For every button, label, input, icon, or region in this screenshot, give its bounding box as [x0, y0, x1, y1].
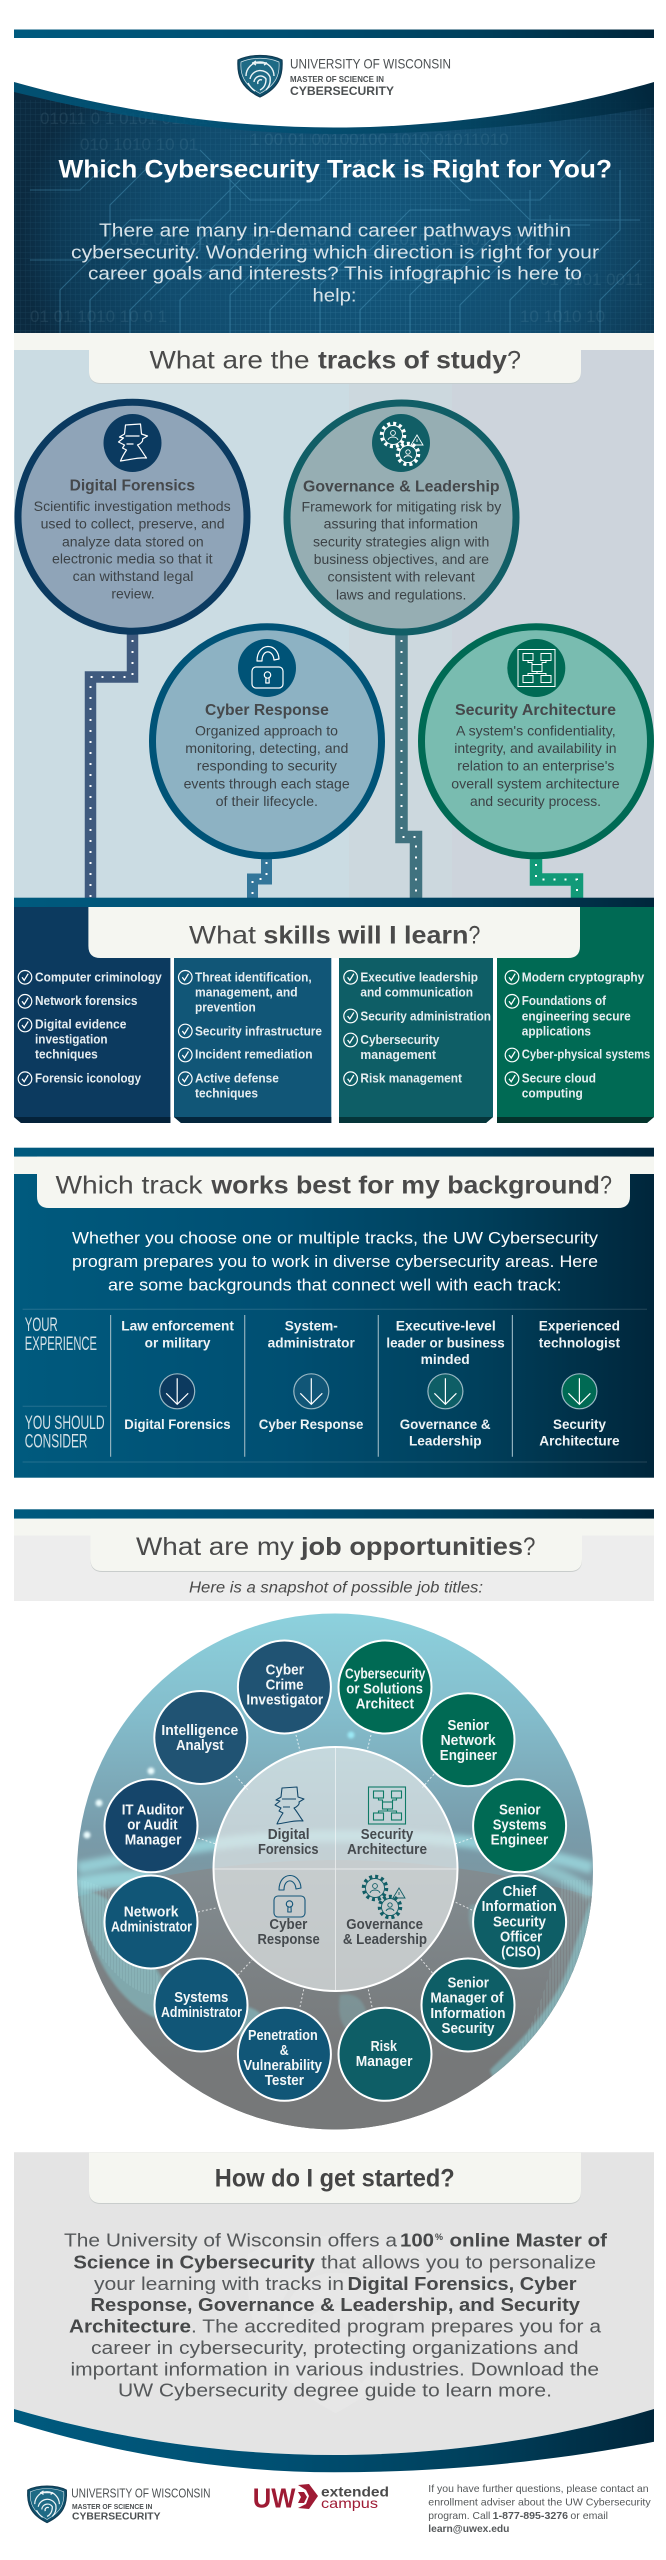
column: system administrator: Cyber Response	[259, 1417, 364, 1432]
logo wordmark: UNIVERSITY OF WISCONSIN	[290, 55, 451, 71]
icon: chevron badge	[298, 2484, 318, 2509]
contact note: If you have further questions, please contact an	[428, 2483, 649, 2495]
check list: Incident remediation	[195, 1047, 313, 1062]
heading: tracks of study: ?	[507, 346, 521, 374]
column: executive leader: leader or business	[386, 1335, 505, 1350]
job: cyber crime investigator	[238, 1640, 331, 1734]
row label: your experience: YOUR	[25, 1315, 58, 1336]
section: header and hero	[14, 30, 654, 333]
label: security architecture	[347, 1827, 427, 1858]
job: cybersecurity or solutions architect: Architect	[356, 1696, 414, 1712]
column: system administrator: administrator	[268, 1335, 356, 1350]
track description: Governance & Leadership	[303, 479, 500, 496]
intro paragraph: are some backgrounds that connect well with each track:	[108, 1276, 562, 1295]
column: law enforcement	[121, 1319, 235, 1432]
label: governance and leadership	[343, 1917, 427, 1948]
column: law enforcement: Digital Forensics	[124, 1417, 231, 1432]
check list: Security infrastructure	[195, 1023, 322, 1038]
connector: governance and leadership	[402, 635, 416, 898]
job: chief information security officer: Security	[493, 1914, 546, 1930]
label: security architecture: Security	[361, 1827, 413, 1843]
job: it auditor or audit manager: or Audit	[127, 1818, 178, 1834]
tracks background	[14, 333, 654, 898]
center circle: track categories	[214, 1747, 458, 1991]
white header panel	[14, 38, 654, 128]
panel: skills	[14, 898, 654, 1123]
track description: Digital Forensics	[70, 478, 195, 495]
column: experienced technologist: Architecture	[539, 1434, 620, 1449]
track description: of their lifecycle.	[216, 793, 318, 809]
hero background with circuit pattern: 101010 1001 10101 1	[390, 230, 555, 249]
job: senior network engineer	[422, 1693, 514, 1786]
track description: electronic media so that it	[52, 550, 213, 566]
check list: management, and	[195, 985, 298, 1000]
job: risk manager: Manager	[356, 2054, 413, 2070]
job: chief information security officer	[473, 1876, 566, 1968]
skills column: cyber response	[174, 907, 331, 1123]
job: intelligence analyst: Intelligence	[161, 1723, 238, 1739]
wordmark	[71, 2486, 210, 2523]
job: chief information security officer: (CISO)	[501, 1944, 541, 1960]
check list: Network forensics	[35, 993, 138, 1008]
track description: analyze data stored on	[62, 533, 204, 549]
check list: Cybersecurity	[360, 1032, 440, 1047]
job: senior manager of information security: Information	[430, 2006, 506, 2022]
track description: Organized approach to	[195, 722, 338, 738]
icon: spy	[275, 1787, 304, 1824]
job: senior manager of information security	[422, 1958, 514, 2052]
closing paragraph	[64, 2230, 608, 2401]
gradient bar	[14, 1509, 654, 1519]
top gradient bar	[14, 30, 654, 38]
closing paragraph: The University of Wisconsin offers a	[64, 2230, 398, 2251]
column: executive leader: Executive-level	[396, 1319, 496, 1334]
job: senior network engineer: Network	[441, 1733, 497, 1749]
closing paragraph: %	[435, 2232, 443, 2242]
intro paragraph: help:	[312, 285, 356, 306]
track description: assuring that information	[324, 516, 478, 532]
skills column: governance and leadership	[339, 907, 493, 1123]
wordmark: CYBERSECURITY	[72, 2512, 161, 2523]
check list: and communication	[360, 985, 473, 1000]
column: law enforcement: Law enforcement	[121, 1319, 235, 1334]
intro paragraph: Whether you choose one or multiple tracks, the UW Cybersecurity	[72, 1228, 599, 1247]
label: digital forensics	[258, 1827, 318, 1858]
icon: network diagram	[368, 1787, 406, 1824]
heading: background: Which track	[56, 1171, 203, 1199]
panel: job opportunities	[14, 1509, 654, 2130]
job: systems administrator	[154, 1958, 248, 2052]
globe graphic	[76, 1613, 594, 2130]
dashed connectors	[198, 1735, 472, 2007]
contact note: program. Call	[428, 2510, 490, 2522]
track description: can withstand legal	[73, 568, 193, 584]
icon: spy	[104, 414, 162, 472]
icon: arrow	[428, 1374, 463, 1409]
icon: network diagram	[507, 639, 565, 697]
table rules	[23, 1309, 647, 1462]
closing paragraph: 100	[400, 2230, 434, 2251]
track description: overall system architecture	[451, 775, 620, 791]
track circle: security architecture	[422, 627, 650, 856]
panel: tracks of study	[14, 333, 654, 898]
intro paragraph: career goals and interests? This infographic is here to	[88, 263, 582, 284]
heading band background	[14, 1519, 654, 1601]
contact note: learn@uwex.edu	[428, 2523, 509, 2535]
heading: job opportunities: ?	[523, 1533, 535, 1561]
job: intelligence analyst	[154, 1691, 247, 1784]
heading: job opportunities	[90, 1519, 582, 1572]
job: cybersecurity or solutions architect	[338, 1640, 432, 1734]
header curve band	[14, 82, 654, 134]
column: system administrator	[259, 1319, 364, 1432]
column: executive leader: minded	[421, 1352, 470, 1367]
check list: prevention	[195, 1000, 256, 1015]
wordmark: MASTER OF SCIENCE IN	[72, 2502, 152, 2511]
job: senior network engineer: Engineer	[440, 1748, 497, 1764]
column: experienced technologist: Experienced	[539, 1319, 620, 1334]
wordmark: UNIVERSITY OF WISCONSIN	[71, 2486, 210, 2500]
logo wordmark: MASTER OF SCIENCE IN	[290, 74, 384, 84]
heading: tracks of study: tracks of study	[318, 346, 507, 374]
icon: arrow	[160, 1374, 195, 1409]
job: senior network engineer: Senior	[448, 1718, 489, 1734]
closing paragraph: career in cybersecurity, protecting organizations and	[91, 2337, 579, 2358]
column: experienced technologist: Security	[553, 1417, 606, 1432]
check list: Secure cloud	[522, 1071, 596, 1086]
footer logo: UW extended campus	[253, 2483, 389, 2514]
track description: responding to security	[197, 758, 337, 774]
job: it auditor or audit manager: Manager	[125, 1833, 182, 1849]
icon: fingerprint shield	[28, 2486, 67, 2523]
job: cyber crime investigator: Cyber	[266, 1662, 304, 1678]
heading: skills: ?	[468, 921, 480, 949]
row label: you should consider: CONSIDER	[25, 1431, 88, 1452]
hero background with circuit pattern: 1 00 01 00100100 1010 01011010	[250, 130, 509, 149]
check list	[178, 970, 322, 1100]
watermark shield	[247, 2236, 424, 2413]
check list: Foundations of	[522, 993, 607, 1008]
footer logo: University of Wisconsin Cybersecurity	[28, 2486, 210, 2523]
job: risk manager: Risk	[371, 2039, 398, 2055]
check list: Security administration	[360, 1008, 491, 1023]
row label: you should consider: YOU SHOULD	[25, 1413, 105, 1434]
track description: and security process.	[470, 793, 601, 809]
track description	[184, 702, 350, 809]
closing paragraph: Architecture	[69, 2315, 191, 2336]
check list: Modern cryptography	[522, 970, 645, 985]
label: governance and leadership: Governance	[346, 1917, 423, 1933]
job: network administrator: Administrator	[111, 1919, 192, 1935]
skills column: security architecture	[497, 907, 654, 1123]
intro paragraph	[71, 220, 599, 306]
hero background with circuit pattern: 01 01 1010 10 0 1	[30, 307, 167, 326]
check list: Risk management	[360, 1071, 463, 1086]
closing paragraph: that allows you to personalize	[321, 2251, 596, 2272]
track description: Security Architecture	[455, 702, 616, 719]
column: executive leader: Governance &	[400, 1417, 491, 1432]
job: penetration and vulnerability tester: Vulnerability	[243, 2058, 322, 2074]
track description: Scientific investigation methods	[34, 498, 231, 514]
hero background with circuit pattern: 010 1010 10 01	[80, 135, 198, 154]
heading: tracks of study: What are the	[150, 346, 310, 374]
job: senior systems engineer	[473, 1779, 566, 1872]
heading: how do I get started: How do I get started?	[215, 2165, 455, 2193]
closing paragraph: Digital Forensics, Cyber	[348, 2273, 576, 2294]
track circle: governance and leadership	[287, 403, 516, 632]
job: penetration and vulnerability tester: &	[280, 2043, 289, 2059]
closing paragraph: Science in Cybersecurity	[73, 2251, 316, 2272]
heading: skills: What	[189, 921, 256, 949]
closing paragraph: your learning with tracks in	[94, 2273, 344, 2294]
job: risk manager	[338, 2008, 432, 2101]
job: penetration and vulnerability tester: Penetration	[248, 2028, 318, 2044]
check list: engineering secure	[522, 1008, 631, 1023]
track description: review.	[111, 585, 155, 601]
job: it auditor or audit manager	[104, 1779, 198, 1872]
intro paragraph: There are many in-demand career pathways within	[99, 220, 571, 241]
track description: Cyber Response	[205, 702, 329, 719]
job: senior manager of information security: Security	[442, 2021, 494, 2037]
icon: arrow	[562, 1374, 597, 1409]
footer	[28, 2483, 651, 2535]
hero background with circuit pattern: 01011 0 1 0101 0110100 11	[40, 109, 249, 128]
job: it auditor or audit manager: IT Auditor	[122, 1803, 184, 1819]
gray background	[14, 2152, 654, 2455]
track description: events through each stage	[184, 775, 350, 791]
heading: tracks of study	[89, 333, 581, 384]
job: systems administrator: Administrator	[161, 2005, 242, 2021]
heading: job opportunities: What are my	[136, 1533, 295, 1561]
icon: fingerprint shield	[238, 56, 282, 97]
track description	[451, 702, 620, 809]
job: cybersecurity or solutions architect: or Solutions	[346, 1681, 423, 1697]
logo: University of Wisconsin Cybersecurity	[238, 55, 451, 98]
hero background with circuit pattern: 101 0101 10101 1010 1100	[120, 230, 327, 249]
job: cyber crime investigator: Investigator	[246, 1692, 324, 1708]
check list: investigation	[35, 1032, 108, 1047]
track description: laws and regulations.	[336, 586, 466, 602]
footer logo: UW extended campus: UW	[253, 2483, 296, 2514]
icon: open lock	[274, 1875, 305, 1917]
bottom curved band	[14, 2409, 654, 2472]
track circle: digital forensics	[18, 402, 247, 631]
label: security architecture: Architecture	[347, 1842, 427, 1858]
intro paragraph: cybersecurity. Wondering which direction is right for your	[71, 241, 599, 262]
label: cyber response	[258, 1917, 320, 1948]
job: chief information security officer: Chief	[503, 1884, 536, 1900]
contact note: or email	[570, 2510, 608, 2522]
track description: consistent with relevant	[328, 569, 475, 585]
icon: gears	[364, 1876, 405, 1918]
icon: gears	[372, 414, 430, 472]
check list: Forensic iconology	[35, 1071, 142, 1086]
contact note	[428, 2483, 651, 2535]
main title: Which Cybersecurity Track is Right for You?	[58, 155, 612, 183]
check list: Executive leadership	[360, 970, 478, 985]
column: executive leader: Leadership	[409, 1434, 482, 1449]
background panel	[14, 1174, 654, 1478]
intro paragraph: program prepares you to work in diverse cybersecurity areas. Here	[72, 1252, 598, 1271]
heading: job opportunities: job opportunities	[300, 1533, 523, 1561]
icon: arrow	[294, 1374, 329, 1409]
row label: your experience	[25, 1315, 97, 1355]
gradient bar	[14, 898, 654, 907]
check list	[505, 970, 650, 1100]
contact note: 1-877-895-3276	[493, 2510, 568, 2522]
logo wordmark	[290, 55, 451, 98]
column: experienced technologist	[539, 1319, 621, 1449]
heading: skills: skills will I learn	[263, 921, 468, 949]
hero background with circuit pattern: 01 0101 0011	[540, 270, 643, 289]
gradient bar	[14, 1148, 654, 1157]
job: senior systems engineer: Senior	[499, 1803, 541, 1819]
closing paragraph: important information in various industries. Download the	[70, 2358, 599, 2379]
connector: security architecture	[536, 859, 577, 898]
footer logo: UW extended campus: extended	[321, 2483, 389, 2499]
check list: management	[360, 1047, 437, 1062]
job: senior manager of information security: Manager of	[430, 1991, 504, 2007]
logo wordmark: CYBERSECURITY	[290, 84, 394, 98]
track description	[302, 479, 501, 602]
job: penetration and vulnerability tester	[238, 2008, 331, 2101]
check list: Computer criminology	[35, 970, 162, 985]
heading: how do I get started	[89, 2152, 581, 2204]
track description: A system's confidentiality,	[456, 722, 616, 738]
job: penetration and vulnerability tester: Tester	[265, 2073, 304, 2089]
check list: computing	[522, 1085, 583, 1100]
job: senior systems engineer: Engineer	[491, 1833, 549, 1849]
intro paragraph	[72, 1228, 599, 1295]
track description: monitoring, detecting, and	[185, 740, 348, 756]
check list: techniques	[195, 1085, 258, 1100]
label: digital forensics: Digital	[268, 1827, 310, 1843]
closing paragraph: online Master of	[450, 2230, 608, 2251]
heading band	[14, 1157, 654, 1174]
row label: your experience: EXPERIENCE	[25, 1334, 97, 1355]
track description: relation to an enterprise's	[457, 758, 614, 774]
job: systems administrator: Systems	[174, 1990, 228, 2006]
column: system administrator: System-	[285, 1319, 338, 1334]
subtitle: Here is a snapshot of possible job titles:	[189, 1579, 483, 1596]
panel: how do I get started	[14, 2152, 654, 2472]
closing paragraph: UW Cybersecurity degree guide to learn more.	[118, 2380, 552, 2401]
heading: background: ?	[600, 1171, 612, 1199]
heading: skills	[88, 907, 580, 958]
label: cyber response: Response	[258, 1932, 320, 1948]
heading: background	[37, 1157, 630, 1208]
track description: Framework for mitigating risk by	[302, 499, 501, 515]
heading: background: works best for my background	[210, 1171, 600, 1199]
check list: Active defense	[195, 1071, 279, 1086]
check list: applications	[522, 1023, 591, 1038]
hero background with circuit pattern	[14, 38, 654, 333]
job: chief information security officer: Officer	[500, 1929, 543, 1945]
skills column: digital forensics	[14, 907, 170, 1123]
column: experienced technologist: technologist	[539, 1335, 621, 1350]
column: law enforcement: or military	[145, 1335, 211, 1350]
label: governance and leadership: & Leadership	[343, 1932, 427, 1948]
check list	[344, 970, 491, 1086]
label: cyber response: Cyber	[269, 1917, 308, 1933]
job: cybersecurity or solutions architect: Cybersecurity	[345, 1666, 425, 1682]
check list: Threat identification,	[195, 970, 312, 985]
track description: integrity, and availability in	[454, 740, 617, 756]
job: network administrator: Network	[124, 1904, 179, 1920]
closing paragraph: Response, Governance & Leadership, and Security	[90, 2294, 581, 2315]
panel: background fit	[14, 1148, 654, 1478]
connector: digital forensics	[90, 634, 132, 898]
job: senior manager of information security: Senior	[448, 1976, 489, 1992]
label: digital forensics: Forensics	[258, 1842, 318, 1858]
job: senior systems engineer: Systems	[493, 1818, 546, 1834]
footer logo: UW extended campus: campus	[321, 2495, 378, 2511]
connector: cyber response	[252, 859, 266, 898]
icon: open lock	[238, 639, 296, 697]
check list	[18, 970, 162, 1086]
track circle: cyber response	[152, 627, 382, 856]
track description: used to collect, preserve, and	[41, 516, 225, 532]
check list: techniques	[35, 1047, 98, 1062]
job: intelligence analyst: Analyst	[176, 1738, 224, 1754]
job: cyber crime investigator: Crime	[266, 1677, 304, 1693]
track description	[34, 478, 231, 601]
contact note: enrollment adviser about the UW Cybersecurity	[428, 2496, 651, 2508]
track description: security strategies align with	[313, 533, 489, 549]
row label: you should consider	[25, 1413, 105, 1452]
track description: business objectives, and are	[314, 551, 489, 567]
job: network administrator	[104, 1876, 198, 1968]
job: chief information security officer: Information	[482, 1899, 557, 1915]
column: executive leader	[386, 1319, 505, 1449]
hero background with circuit pattern: 10 1010 10	[520, 307, 605, 326]
check list: Digital evidence	[35, 1017, 126, 1032]
closing paragraph: . The accredited program prepares you for a	[191, 2315, 602, 2336]
